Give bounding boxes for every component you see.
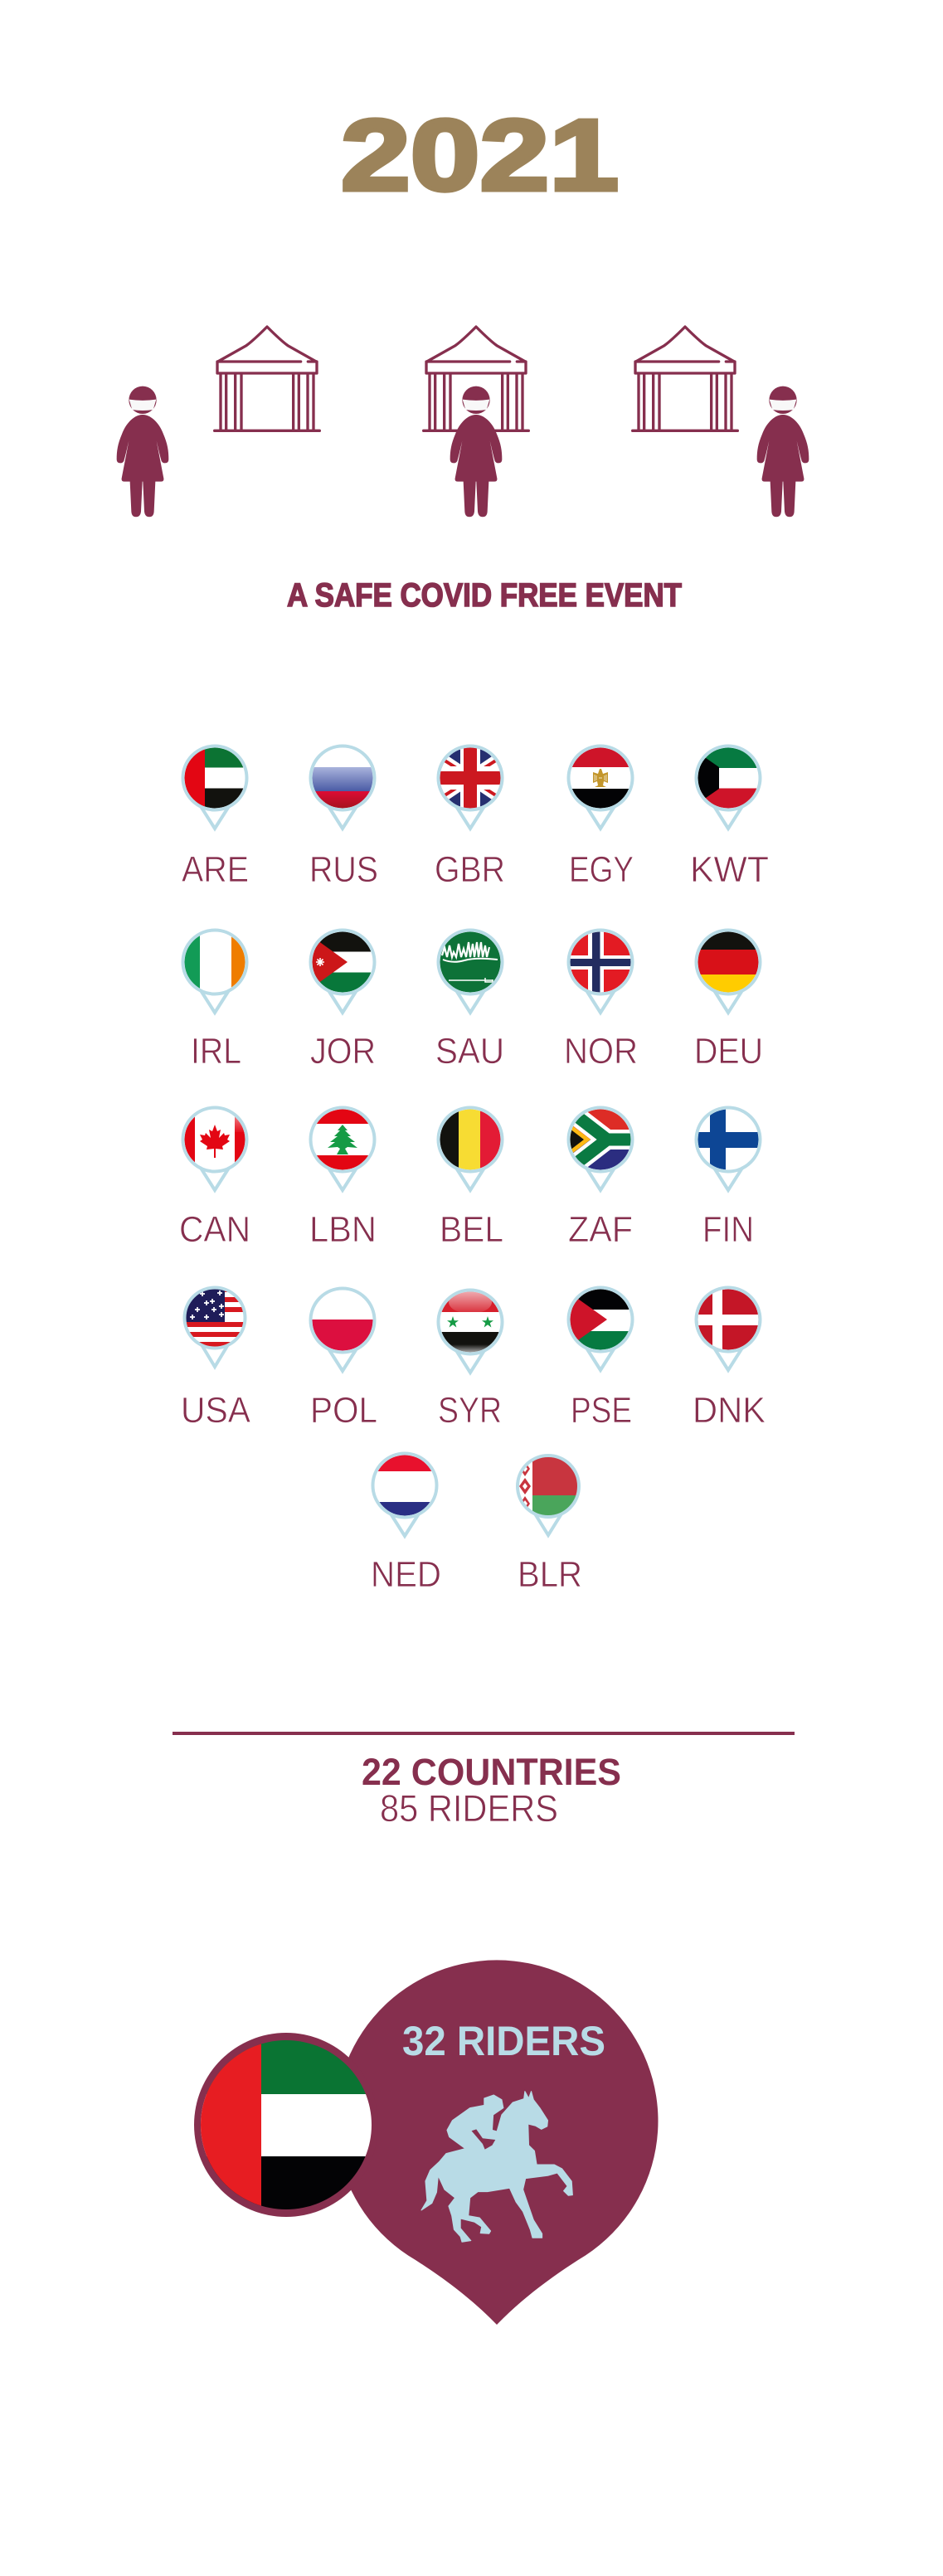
label: SAU: SAU <box>435 1032 504 1072</box>
country pins grid <box>179 746 769 1595</box>
pin: LBN <box>310 1108 375 1190</box>
icon: woman with mask right <box>757 386 809 517</box>
pin: KWT <box>697 746 760 829</box>
pin: SAU <box>438 931 503 1013</box>
stat: 22 countries: 22 COUNTRIES <box>362 1751 621 1793</box>
pin: JOR <box>310 931 375 1013</box>
label: USA: USA <box>181 1391 250 1431</box>
pin: DNK <box>697 1287 760 1370</box>
icon: woman with mask left <box>117 386 168 517</box>
pin: PSE <box>569 1287 632 1370</box>
label: ZAF: ZAF <box>568 1210 633 1250</box>
icon: tent left <box>215 327 319 430</box>
text: 32 riders: 32 RIDERS <box>402 2018 605 2064</box>
pin: NOR <box>569 931 632 1013</box>
callout: UAE riders pin <box>191 1960 659 2325</box>
label: DEU: DEU <box>694 1032 763 1072</box>
label: DNK: DNK <box>693 1391 766 1431</box>
label: CAN: CAN <box>179 1210 250 1250</box>
pin: BEL <box>438 1108 503 1190</box>
pin: FIN <box>697 1108 760 1190</box>
illustration: tents and masked women <box>117 327 809 517</box>
pin: POL <box>310 1289 375 1371</box>
label: RUS: RUS <box>309 850 378 890</box>
label: BEL: BEL <box>440 1210 503 1250</box>
stat: 85 riders: 85 RIDERS <box>380 1787 558 1830</box>
pin: USA <box>184 1287 245 1367</box>
pin: RUS <box>310 746 375 829</box>
label: NED: NED <box>371 1555 441 1595</box>
label: LBN: LBN <box>309 1210 377 1250</box>
label: NOR: NOR <box>564 1032 638 1072</box>
pin: IRL <box>182 931 247 1013</box>
pin: EGY <box>569 746 632 829</box>
pin: ARE <box>182 746 247 829</box>
label: BLR: BLR <box>518 1555 582 1595</box>
pin: CAN <box>182 1108 247 1190</box>
title: 2021 <box>341 99 619 211</box>
heading: safe event: A SAFE COVID FREE EVENT <box>287 577 682 614</box>
divider line <box>173 1732 795 1735</box>
label: GBR: GBR <box>435 850 505 890</box>
icon: tent middle <box>424 327 528 430</box>
pin shape <box>335 1960 659 2325</box>
label: PSE: PSE <box>571 1391 632 1431</box>
pin: DEU <box>697 931 760 1013</box>
pin: BLR <box>518 1456 579 1535</box>
label: EGY: EGY <box>569 850 634 890</box>
label: IRL: IRL <box>191 1032 241 1072</box>
label: ARE: ARE <box>182 850 249 890</box>
label: KWT: KWT <box>690 850 769 890</box>
label: SYR: SYR <box>438 1391 502 1431</box>
label: POL: POL <box>310 1391 377 1431</box>
pin: NED <box>373 1453 436 1536</box>
pin: GBR <box>438 746 503 829</box>
pin: SYR <box>438 1290 503 1373</box>
label: FIN: FIN <box>702 1210 754 1250</box>
label: JOR: JOR <box>310 1032 376 1072</box>
icon: horse and jockey <box>421 2092 572 2242</box>
pin: ZAF <box>567 1108 634 1190</box>
icon: tent right <box>633 327 737 430</box>
icon: woman with mask middle <box>450 386 502 517</box>
flag: UAE large <box>194 2033 372 2217</box>
